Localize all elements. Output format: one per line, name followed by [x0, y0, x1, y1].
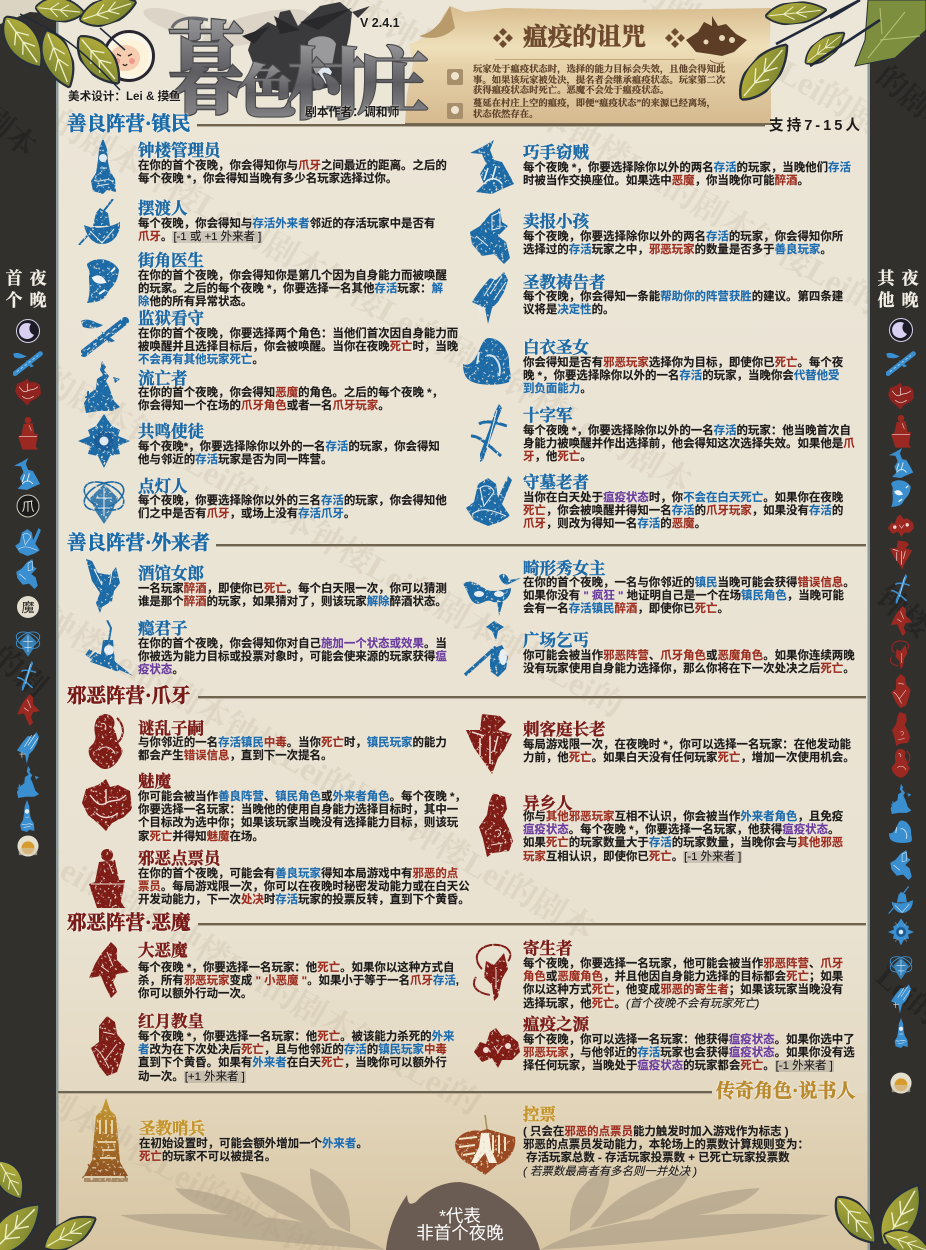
footnote — [400, 1208, 520, 1241]
heading: townsfolk: 善良阵营·镇民 — [67, 114, 191, 135]
footnote: 非首个夜晚 — [416, 1222, 504, 1242]
role: 魅魔: 家死亡并得知魅魔在场。 — [138, 831, 264, 843]
role: 卖报小孩: 卖报小孩 — [523, 212, 589, 231]
role: 卖报小孩: 每个夜晚，你要选择除你以外的两名存活的玩家，你会得知你所 — [523, 230, 843, 242]
other nights order icons — [883, 316, 919, 1096]
role: 瘾君子 — [85, 619, 447, 676]
role: 异乡人: 玩家互相认识，即使你已死亡。[-1 外来者 ] — [523, 851, 741, 863]
leaves: bottom left — [0, 1150, 110, 1250]
role: 大恶魔: 你可以额外行动一次。 — [138, 988, 252, 1000]
heading: outsiders: 善良阵营·外来者 — [67, 533, 210, 554]
first night order icons — [10, 316, 46, 862]
role: 瘾君子: 瘾君子 — [138, 619, 188, 638]
icon: hooded stranger — [479, 793, 513, 857]
side label: other nights: 他 — [878, 291, 894, 310]
version label: V 2.4.1 — [360, 16, 400, 30]
role: 白衣圣女: 晚 *，你要选择除你以外的一名存活的玩家，当晚你会代替他受 — [523, 370, 839, 382]
role: 魅魔 — [78, 773, 456, 843]
icon: skull bullet two — [447, 103, 463, 119]
side label: other nights: 其 — [878, 269, 894, 288]
bottom leaf silhouette decoration — [120, 1168, 830, 1250]
plague rules text: 玩家处于瘟疫状态时，选择的能力目标会失效，且他会得知此 — [473, 65, 725, 75]
role: 控票: 邪恶的点票员发动能力，本轮场上的票数计算规则变为： — [523, 1139, 809, 1151]
icon: red moon pope — [91, 1016, 125, 1076]
role: 点灯人 — [83, 477, 447, 524]
role: 瘾君子: 疫状态。 — [138, 664, 184, 676]
role: 谜乱子嗣: 与你邻近的一名存活镇民中毒。当你死亡时，镇民玩家的能力 — [138, 736, 447, 748]
side label: first night: 首 — [6, 269, 22, 288]
role: 魅魔: 你可能会被当作善良阵营、镇民角色或外来者角色。每个夜晚 *， — [138, 790, 466, 802]
side label: other nights: 晚 — [902, 291, 918, 310]
role: 控票 — [455, 1106, 855, 1178]
icon: resonant eye — [78, 414, 130, 468]
icon: ferry boat — [78, 199, 120, 245]
role: 钟楼管理员: 每个夜晚 *，你会得知当晚有多少名玩家选择过你。 — [138, 173, 397, 185]
role: 控票: 存活玩家总数 - 存活玩家投票数 + 已死亡玩家投票数 — [526, 1152, 790, 1164]
icon: lamp lighter — [83, 481, 125, 524]
logo: dark figures behind the title — [242, 2, 370, 94]
icon: parasite — [472, 943, 518, 1003]
role: 邪恶点票员: 邪恶点票员 — [138, 849, 220, 868]
icon: masquerade mask — [463, 572, 521, 616]
role: 街角医生 — [87, 251, 447, 308]
role: 十字军: 身能力被唤醒并作出选择前，他会得知这次选择失效。如果他是爪 — [523, 438, 855, 450]
role: 卖报小孩: 选择过的存活玩家之中，邪恶玩家的数量是否多于善良玩家。 — [523, 244, 832, 256]
icon: vote counter — [89, 848, 125, 908]
plague rules text: 状态依然存在。 — [473, 110, 538, 120]
role: 点灯人: 每个夜晚，你要选择除你以外的三名存活的玩家，你会得知他 — [138, 494, 447, 506]
role: 寄生者: 角色或恶魔角色，并且他因自身能力选择的目标都会死亡；如果 — [523, 971, 843, 983]
icon: tavern girl — [86, 559, 120, 613]
role: 红月教皇: 直到下个黄昏。如果有外来者在白天死亡，当晚你可以额外行 — [138, 1057, 447, 1069]
role: 圣教哨兵: 圣教哨兵 — [139, 1119, 205, 1138]
role: 共鸣使徒: 共鸣使徒 — [138, 422, 204, 441]
role: 广场乞丐 — [462, 621, 860, 679]
icon: skull bullet one — [447, 69, 463, 85]
role: 卖报小孩 — [470, 208, 843, 264]
title: 暮色村庄 — [167, 16, 429, 129]
role: 酒馆女郎: 酒馆女郎 — [138, 564, 204, 583]
footnote: *代表 — [439, 1206, 481, 1226]
role: 流亡者: 你会得知一个在场的爪牙角色或者一名爪牙玩家。 — [138, 400, 390, 412]
role: 监狱看守: 被唤醒并且选择目标后，你会被唤醒。当你在夜晚死亡时，当晚 — [138, 341, 458, 353]
role: 监狱看守: 在你的首个夜晚，你要选择两个角色：当他们首次因自身能力而 — [138, 328, 458, 340]
role: 守墓老者: 死亡，你会被唤醒并得知一名存活的爪牙玩家，如果没有存活的 — [523, 505, 843, 517]
role: 摆渡人 — [78, 199, 435, 245]
role: 广场乞丐: 你可能会被当作邪恶阵营、爪牙角色或恶魔角色。如果你连续两晚 — [523, 650, 855, 662]
role: 钟楼管理员: 在你的首个夜晚，你会得知你与爪牙之间最近的距离。之后的 — [138, 160, 447, 172]
role: 共鸣使徒: 他与邻近的存活玩家是否为同一阵营。 — [138, 454, 332, 466]
icon: white-robed saint — [463, 338, 511, 385]
title: 暮色村庄: 村 — [287, 42, 365, 129]
role: 谜乱子嗣 — [78, 714, 456, 772]
icon: beggar with staff — [464, 621, 510, 679]
plague rules text — [473, 64, 726, 120]
role: 瘟疫之源: 瘟疫之源 — [523, 1015, 589, 1034]
role: 白衣圣女: 白衣圣女 — [523, 338, 589, 357]
role: 瘟疫之源: 择任何玩家，当晚处于瘟疫状态的玩家都会死亡。[-1 外来者 ] — [523, 1060, 833, 1072]
title: 暮色村庄: 庄 — [357, 43, 429, 123]
first night order icons: 爪 — [21, 499, 35, 514]
role: 巧手窃贼: 每个夜晚 *，你要选择除你以外的两名存活的玩家，当晚他们存活 — [523, 162, 851, 174]
role: 点灯人: 点灯人 — [138, 477, 188, 496]
side label: first night: 夜 — [30, 269, 46, 288]
role: 邪恶点票员: 票员。每局游戏限一次，你可以在夜晚时秘密发动能力或在白天公 — [138, 881, 470, 893]
role: 魅魔: 个目标改为选中你；如果该玩家当晚没有选择能力目标，则该玩 — [138, 817, 458, 829]
role: 街角医生: 在你的首个夜晚，你会得知你是第几个因为自身能力而被唤醒 — [138, 270, 447, 282]
title: 暮色村庄: 暮 — [167, 17, 245, 127]
role: 白衣圣女: 你会得知是否有邪恶玩家选择你为目标，即使你已死亡。每个夜 — [523, 356, 843, 368]
role: 控票: ( 只会在邪恶的点票员能力触发时加入游戏作为标志 ) — [523, 1126, 789, 1138]
role: 流亡者: 在你的首个夜晚，你会得知恶魔的角色。之后的每个夜晚 *， — [138, 386, 443, 398]
heading: legendary storyteller: 传奇角色·说书人 — [716, 1081, 855, 1102]
icon: clock tower — [91, 138, 116, 194]
plague rules text: 事。如果该玩家被处决，提名者会继承瘟疫状态。玩家第二次 — [473, 76, 725, 86]
icon: serpent child — [87, 714, 125, 772]
player count: 支持7-15人 — [769, 118, 863, 134]
role: 监狱看守 — [81, 309, 458, 366]
role: 监狱看守: 不会再有其他玩家死亡。 — [138, 354, 264, 366]
role: 刺客庭长老 — [462, 714, 860, 774]
role: 圣教哨兵 — [82, 1098, 422, 1182]
role: 大恶魔: 杀，所有邪恶玩家变成 " 小恶魔 "。如果小于等于一名爪牙存活, — [138, 975, 459, 987]
role: 白衣圣女: 到负面能力。 — [523, 383, 592, 395]
role: 异乡人: 瘟疫状态。每个夜晚 *，你要选择一名玩家，他获得瘟疫状态。 — [523, 824, 839, 836]
role: 街角医生: 街角医生 — [138, 251, 204, 270]
role: 异乡人: 你与其他邪恶玩家互相不认识，你会被当作外来者角色，且免疫 — [523, 810, 843, 822]
role: 邪恶点票员: 在你的首个夜晚，可能会有善良玩家得知本局游戏中有邪恶的点 — [138, 868, 458, 880]
role: 流亡者 — [84, 361, 443, 413]
side label: first night — [4, 268, 52, 312]
icon: succubus — [82, 779, 132, 831]
icon: assassin elder — [466, 714, 512, 774]
role: 谜乱子嗣: 都会产生错误信息，直到下一次提名。 — [138, 750, 332, 762]
role: 巧手窃贼 — [470, 140, 851, 194]
side label: first night: 晚 — [30, 291, 46, 310]
role: 酒馆女郎: 谁是那个醉酒的玩家，如果猜对了，则该玩家解除醉酒状态。 — [138, 596, 447, 608]
role: 寄生者: 选择玩家，他死亡。(首个夜晚不会有玩家死亡) — [523, 998, 759, 1010]
role: 巧手窃贼: 巧手窃贼 — [523, 143, 589, 162]
icon: jail key — [81, 317, 129, 357]
role: 红月教皇: 红月教皇 — [138, 1012, 204, 1031]
role: 刺客庭长老: 力前，他死亡。如果白天没有任何玩家死亡，增加一次使用机会。 — [523, 752, 855, 764]
role: 寄生者 — [462, 940, 860, 1010]
art credit: 美术设计：Lei & 摸鱼 — [68, 90, 181, 103]
role: 魅魔: 魅魔 — [138, 772, 171, 791]
role: 白衣圣女 — [463, 338, 843, 395]
role: 畸形秀女主: 在你的首个夜晚，一名与你邻近的镇民当晚可能会获得错误信息。 — [523, 576, 855, 588]
role: 瘾君子: 在你的首个夜晚，你会得知你对自己施加一个状态或效果。当 — [138, 638, 447, 650]
role: 十字军 — [471, 404, 855, 463]
role: 邪恶点票员 — [78, 848, 456, 908]
role: 点灯人: 们之中是否有爪牙，或场上没有存活爪牙。 — [138, 508, 355, 520]
role: 红月教皇: 者改为在下次处决后死亡，且与他邻近的存活的镇民玩家中毒 — [138, 1044, 447, 1056]
role: 街角医生: 的玩家。之后的每个夜晚 *，你要选择一名其他存活玩家：解 — [138, 283, 443, 295]
first night order icons: 魔 — [21, 600, 35, 615]
role: 守墓老者: 爪牙，则改为得知一名存活的恶魔。 — [523, 518, 706, 530]
plague panel title: 瘟疫的诅咒 — [523, 24, 646, 51]
side label: other nights — [876, 268, 924, 312]
heading: minions: 邪恶阵营·爪牙 — [67, 686, 191, 707]
role: 瘟疫之源: 邪恶玩家，与他邻近的存活玩家也会获得瘟疫状态。如果你没有选 — [523, 1047, 855, 1059]
role: 十字军: 十字军 — [523, 406, 572, 425]
role: 酒馆女郎: 一名玩家醉酒，即使你已死亡。每个白天限一次，你可以猜测 — [138, 582, 447, 594]
role: 谜乱子嗣: 谜乱子嗣 — [138, 719, 204, 738]
icon: grave keeper — [466, 476, 512, 526]
icon: syringe and bottle — [85, 620, 135, 676]
leaves: top left — [0, 0, 150, 100]
role: 钟楼管理员: 钟楼管理员 — [138, 141, 220, 160]
role: 广场乞丐: 广场乞丐 — [523, 631, 589, 650]
heading: demons: 邪恶阵营·恶魔 — [67, 913, 191, 934]
role: 刺客庭长老: 刺客庭长老 — [523, 720, 606, 739]
title: 暮色村庄: 色 — [238, 60, 296, 125]
role: 圣教祷告者: 每个夜晚，你会得知一条能帮助你的阵营获胜的建议。第四条建 — [523, 290, 843, 302]
role: 共鸣使徒 — [78, 414, 440, 468]
role: 摆渡人: 爪牙。[-1 或 +1 外来者 ] — [138, 231, 261, 243]
role: 邪恶点票员: 开发动能力，下一次处决时存活玩家的投票反转，直到下个黄昏。 — [138, 894, 470, 906]
role: 畸形秀女主: 畸形秀女主 — [523, 559, 606, 578]
role: 寄生者: 你以这种方式死亡，他变成邪恶的寄生者；如果该玩家当晚没有 — [523, 984, 843, 996]
role: 红月教皇: 动一次。[+1 外来者 ] — [138, 1071, 245, 1083]
role: 守墓老者 — [466, 473, 843, 530]
role: 街角医生: 除他的所有异常状态。 — [138, 296, 252, 308]
author credit: 剧本作者：调和师 — [305, 105, 399, 119]
role: 摆渡人: 每个夜晚，你会得知与存活外来者邻近的存活玩家中是否有 — [138, 218, 435, 230]
role: 广场乞丐: 没有玩家使用自身能力选择你，那么你将在下一次处决之后死亡。 — [523, 663, 855, 675]
role: 流亡者: 流亡者 — [138, 369, 188, 388]
role: 守墓老者: 当你在白天处于瘟疫状态时，你不会在白天死亡。如果你在夜晚 — [523, 492, 843, 504]
avatar: sheep mascot — [106, 30, 155, 82]
role: 大恶魔 — [78, 942, 456, 998]
role: 异乡人: 异乡人 — [523, 794, 572, 813]
icon: plague source — [474, 1028, 520, 1068]
side label: other nights: 夜 — [902, 269, 918, 288]
icon: right ornament — [665, 28, 685, 48]
role: 瘾君子: 你被选为能力目标或投票对象时，可能会使来源的玩家获得瘟 — [138, 651, 447, 663]
role: 异乡人 — [462, 793, 860, 863]
icon: plague doctor — [87, 259, 119, 303]
role: 异乡人: 如果死亡的玩家数量大于存活的玩家数量，当晚你会与其他邪恶 — [523, 837, 843, 849]
role: 大恶魔: 每个夜晚 *，你要选择一名玩家：他死亡。如果你以这种方式自 — [138, 962, 454, 974]
icon: newsboy — [470, 208, 510, 264]
icon: thief — [470, 140, 514, 194]
role: 红月教皇 — [78, 1013, 456, 1083]
role: 畸形秀女主: 会有一名存活镇民醉酒，即使你已死亡。 — [523, 603, 729, 615]
role: 圣教祷告者: 圣教祷告者 — [523, 273, 606, 292]
role: 寄生者: 每个夜晚，你要选择一名玩家，他可能会被当作邪恶阵营、爪牙 — [523, 958, 843, 970]
role: 大恶魔: 大恶魔 — [138, 941, 188, 960]
role: 共鸣使徒: 每个夜晚*，你要选择除你以外的一名存活的玩家，你会得知 — [138, 440, 440, 452]
role: 畸形秀女主: 如果你没有 " 疯狂 " 地证明自己是一个在场镇民角色，当晚可能 — [523, 590, 844, 602]
role: 圣教哨兵: 在初始设置时，可能会额外增加一个外来者。 — [139, 1138, 368, 1150]
role: 魅魔: 你要选择一名玩家：当晚他的使用自身能力选择目标时，其中一 — [138, 804, 458, 816]
icon: crusader sword — [471, 404, 508, 462]
role: 十字军: 牙，他死亡。 — [523, 451, 592, 463]
icon: vote control emblem — [455, 1115, 517, 1177]
role: 刺客庭长老: 每局游戏限一次，在夜晚时 *，你可以选择一名玩家：在他发动能 — [523, 738, 851, 750]
leaves: top right — [730, 0, 926, 112]
role: 巧手窃贼: 时被当作交换座位。如果选中恶魔，你当晚你可能醉酒。 — [523, 175, 809, 187]
role: 控票: 控票 — [523, 1105, 556, 1124]
role: 畸形秀女主 — [462, 560, 860, 616]
icon: exile figure — [84, 361, 120, 413]
side label: first night: 个 — [6, 291, 22, 310]
role: 寄生者: 寄生者 — [523, 939, 572, 958]
role: 监狱看守: 监狱看守 — [138, 309, 204, 328]
icon: praying hands — [472, 272, 508, 324]
role: 酒馆女郎 — [86, 559, 447, 613]
icon: left ornament — [493, 28, 513, 48]
role: 守墓老者: 守墓老者 — [523, 473, 589, 492]
role: 圣教祷告者 — [472, 272, 843, 324]
role: 红月教皇: 每个夜晚 *，你要选择一名玩家：他死亡。被该能力杀死的外来 — [138, 1030, 454, 1042]
icon: plague village emblem — [686, 16, 747, 64]
role: 控票: ( 若票数最高者有多名则一并处决 ) — [523, 1166, 697, 1178]
role: 瘟疫之源 — [462, 1016, 860, 1074]
role: 圣教祷告者: 议将是决定性的。 — [523, 304, 614, 316]
role: 瘟疫之源: 每个夜晚，你可以选择一名玩家：他获得瘟疫状态。如果你选中了 — [523, 1034, 855, 1046]
plague rules text: 获得瘟疫状态时死亡。恶魔不会处于瘟疫状态。 蔓延在村庄上空的瘟疫，即便“瘟疫状态”的来源已经离场， — [473, 86, 716, 109]
role: 十字军: 每个夜晚 *，你要选择除你以外的一名存活的玩家：他当晚首次自 — [523, 424, 851, 436]
role: 钟楼管理员 — [91, 138, 447, 194]
leaves: bottom right — [816, 1150, 926, 1250]
role: 圣教哨兵: 死亡的玩家不可以被提名。 — [139, 1151, 276, 1163]
icon: great demon — [87, 942, 129, 998]
role: 摆渡人: 摆渡人 — [138, 199, 188, 218]
header scroll: plague curse panel — [405, 6, 771, 125]
icon: sentry tower — [82, 1098, 128, 1182]
